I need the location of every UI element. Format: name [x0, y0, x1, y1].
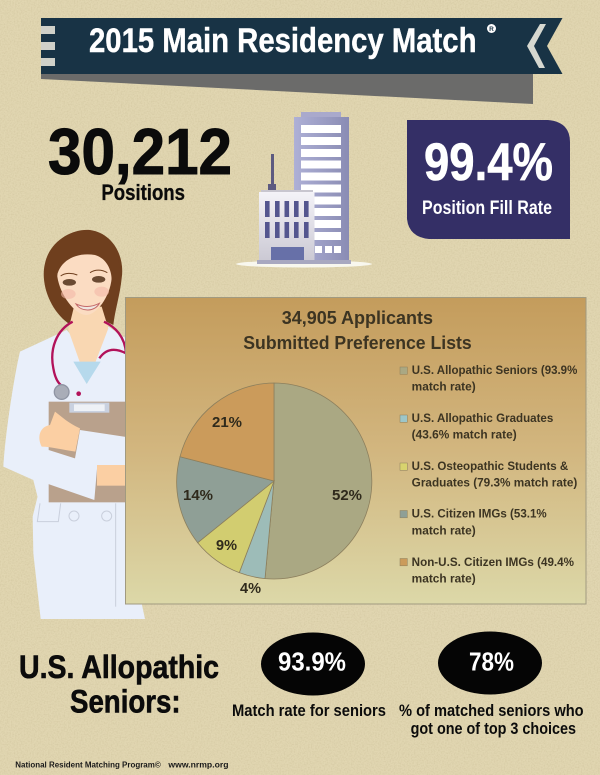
pie labels: 14%	[183, 488, 213, 504]
coat upper	[3, 327, 133, 507]
doctor illustration	[3, 230, 145, 619]
legend item: citizen IMGs: U.S. Citizen IMGs (53.1%	[412, 509, 547, 521]
fill rate panel: Position Fill Rate	[422, 198, 552, 219]
footer source: www.nrmp.org	[167, 760, 229, 769]
neck and chest	[68, 307, 108, 383]
banner chevron	[527, 24, 546, 68]
chart title: 34,905 Applicants	[282, 308, 433, 328]
coat lower	[33, 487, 145, 619]
legend item: allopathic seniors	[400, 365, 577, 394]
panel: applicants pie chart	[126, 298, 586, 604]
footer source	[15, 760, 229, 769]
legend item: citizen IMGs	[400, 509, 547, 537]
legend	[400, 365, 577, 586]
mouth	[76, 303, 99, 310]
title banner	[41, 18, 562, 104]
title: 2015 Main Residency Match	[89, 22, 476, 60]
legend item: allopathic graduates: (43.6% match rate)	[412, 430, 517, 442]
legend item: osteopathic: Graduates (79.3% match rate)	[412, 478, 577, 490]
stat: top 3 choices	[399, 632, 584, 738]
hair fringe	[47, 231, 121, 280]
pie labels: 21%	[212, 415, 242, 431]
seniors heading: U.S. Allopathic	[19, 649, 219, 685]
legend item: osteopathic: U.S. Osteopathic Students &	[412, 461, 568, 473]
legend item: non-citizen IMGs: match rate)	[412, 574, 476, 586]
registered mark: R	[489, 26, 494, 33]
legend item: citizen IMGs: match rate)	[412, 525, 476, 537]
pie labels: 4%	[240, 581, 261, 597]
legend item: allopathic graduates: U.S. Allopathic Graduates	[412, 413, 553, 425]
legend item: non-citizen IMGs: Non-U.S. Citizen IMGs (49.4%	[412, 557, 574, 569]
stat: match rate for seniors: Match rate for seniors	[232, 701, 386, 720]
blue shirt	[73, 362, 101, 384]
seniors heading: Seniors:	[70, 684, 181, 720]
seniors heading	[19, 649, 219, 720]
stat: match rate for seniors: 93.9%	[278, 647, 346, 677]
fill rate panel	[407, 120, 570, 239]
fill rate panel: 99.4%	[424, 133, 553, 192]
eyes	[63, 276, 105, 286]
pie chart	[177, 383, 372, 579]
pie labels: 9%	[216, 538, 237, 554]
stat: match rate for seniors	[232, 632, 386, 720]
legend item: allopathic seniors: match rate)	[412, 382, 476, 394]
footer source: National Resident Matching Program©	[15, 760, 161, 769]
stat: top 3 choices: 78%	[469, 647, 514, 677]
stethoscope	[52, 322, 126, 399]
pie labels	[183, 415, 362, 597]
positions stat: Positions	[101, 180, 185, 205]
icon: hospital buildings	[236, 112, 372, 268]
positions stat: 30,212	[48, 115, 232, 188]
legend item: non-citizen IMGs	[400, 557, 574, 586]
legend item: allopathic graduates	[400, 413, 553, 442]
coat buttons	[37, 503, 116, 607]
hair back	[44, 230, 122, 325]
left hand	[39, 412, 80, 452]
pie labels: 52%	[332, 488, 362, 504]
clipboard	[49, 402, 129, 502]
banner ribbon	[41, 18, 562, 74]
chart title	[243, 308, 472, 353]
right hand	[97, 465, 129, 486]
banner left stripes	[41, 26, 55, 66]
eyebrows	[61, 270, 107, 276]
cheeks	[61, 287, 109, 299]
legend item: osteopathic	[400, 461, 577, 490]
forearm sleeve	[37, 430, 128, 500]
face	[57, 251, 112, 315]
banner shadow	[41, 74, 533, 104]
registered mark	[487, 24, 496, 33]
clip	[69, 403, 109, 413]
chart title: Submitted Preference Lists	[243, 333, 472, 353]
legend item: allopathic seniors: U.S. Allopathic Seniors (93.9%	[412, 365, 577, 377]
